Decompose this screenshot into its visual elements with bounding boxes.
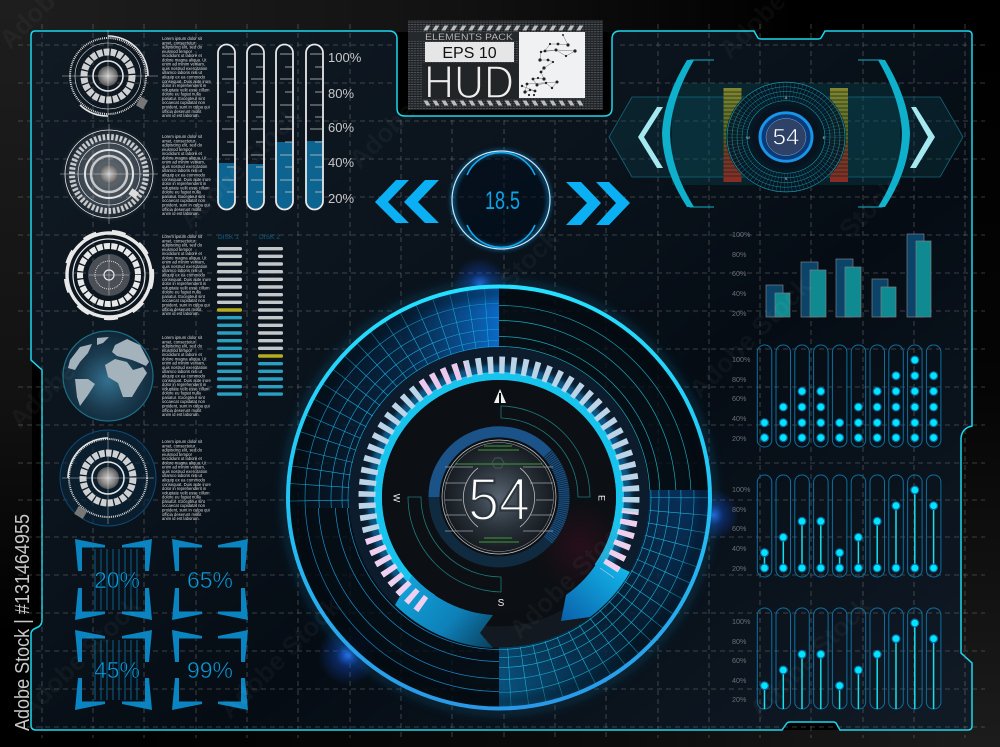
text blocks: lorem ipsum columns: officia deserunt mollit: [162, 207, 202, 212]
text blocks: lorem ipsum columns: quis nostrud exercitation: [162, 264, 208, 269]
chart: disk level bars: DISK 2: [259, 234, 280, 241]
chart: bar chart: 40%: [732, 289, 747, 298]
text blocks: lorem ipsum columns: dolore eu fugiat nulla: [162, 290, 202, 295]
text blocks: lorem ipsum columns: incididunt ut labore et: [162, 456, 203, 461]
text blocks: lorem ipsum columns: proident, sunt in culpa qui: [162, 104, 210, 109]
text blocks: lorem ipsum columns: ullamco laboris nisi ut: [162, 70, 203, 75]
chart: lollipop sliders: 20%: [732, 695, 747, 704]
mini gauge: E: [823, 136, 826, 140]
stock id side label: Adobe Stock | #131464955: [12, 514, 34, 731]
lens glows: [318, 257, 739, 685]
text blocks: lorem ipsum columns: dolor in reprehenderit in: [162, 281, 207, 286]
icon: globe: [63, 331, 153, 421]
gauge: third dial: [65, 231, 153, 319]
inner dark disc: [349, 348, 649, 648]
brackets: [663, 60, 909, 207]
text blocks: lorem ipsum columns: ullamco laboris nisi ut: [162, 369, 203, 374]
mini gauge: A: [785, 96, 788, 100]
text blocks: lorem ipsum columns: quis nostrud exercitation: [162, 66, 208, 71]
text blocks: lorem ipsum columns: voluptate velit esse cillum: [162, 490, 210, 495]
chart: lollipop sliders: 40%: [732, 676, 747, 685]
text blocks: lorem ipsum columns: pariatur. Excepteur sint: [162, 194, 206, 199]
text blocks: lorem ipsum columns: dolore magna aliqua. Ut: [162, 255, 207, 260]
right chevron: [910, 107, 935, 168]
watermark: Adobe Stock: [683, 270, 817, 404]
right level meter: [830, 88, 848, 182]
dial ring: [434, 432, 564, 562]
chart: thermometer tubes: 20%: [328, 191, 354, 206]
text blocks: lorem ipsum columns: proident, sunt in culpa qui: [162, 302, 210, 307]
icon: molecule graphic: [519, 32, 585, 98]
text blocks: lorem ipsum columns: dolore eu fugiat nulla: [162, 495, 202, 500]
text blocks: lorem ipsum columns: proident, sunt in culpa qui: [162, 202, 210, 207]
chart: lollipop sliders: [732, 608, 941, 709]
text blocks: lorem ipsum columns: occaecat cupidatat non: [162, 298, 206, 303]
text blocks: lorem ipsum columns: Lorem ipsum dolor sit: [162, 36, 202, 41]
text blocks: lorem ipsum columns: consequat. Duis aute irure: [162, 378, 212, 383]
watermark: Stock: [493, 223, 565, 294]
text blocks: lorem ipsum columns: Lorem ipsum dolor sit: [162, 234, 202, 239]
text blocks: lorem ipsum columns: officia deserunt mollit: [162, 307, 202, 312]
text blocks: lorem ipsum columns: pariatur. Excepteur sint: [162, 96, 206, 101]
text blocks: lorem ipsum columns: anim id est laborum.: [162, 113, 200, 118]
watermark: Adobe Stock: [213, 590, 347, 724]
compass arcs: [408, 406, 590, 592]
text blocks: lorem ipsum columns: amet, consectetur: [162, 339, 196, 344]
text blocks: lorem ipsum columns: pariatur. Excepteur sint: [162, 294, 206, 299]
chart: thermometer tubes: [218, 44, 362, 210]
watermark: Adobe: [343, 96, 421, 174]
text blocks: lorem ipsum columns: Lorem ipsum dolor sit: [162, 439, 202, 444]
text blocks: lorem ipsum columns: incididunt ut labore et: [162, 53, 203, 58]
text blocks: lorem ipsum columns: enim ad minim veniam,: [162, 160, 205, 165]
chart: dumbbell sliders: 100%: [732, 485, 751, 494]
text blocks: lorem ipsum columns: dolor in reprehenderit in: [162, 382, 207, 387]
chart: dumbbell sliders: 40%: [732, 544, 747, 553]
text blocks: lorem ipsum columns: occaecat cupidatat non: [162, 198, 206, 203]
chart: thermometer tubes: 80%: [328, 86, 354, 101]
outer ring: [294, 292, 704, 702]
chart: lollipop sliders: 60%: [732, 656, 747, 665]
text blocks: lorem ipsum columns: adipiscing elit, sed do: [162, 243, 203, 248]
text blocks: lorem ipsum columns: voluptate velit esse cillum: [162, 285, 210, 290]
text blocks: lorem ipsum columns: incididunt ut labore et: [162, 352, 203, 357]
dial value 54: 54: [468, 466, 530, 533]
text blocks: lorem ipsum columns: quis nostrud exercitation: [162, 469, 208, 474]
text blocks: lorem ipsum columns: dolor in reprehenderit in: [162, 181, 207, 186]
text blocks: lorem ipsum columns: incididunt ut labore et: [162, 151, 203, 156]
text blocks: lorem ipsum columns: dolor in reprehenderit in: [162, 83, 207, 88]
text blocks: lorem ipsum columns: occaecat cupidatat non: [162, 399, 206, 404]
title block: HUD elements pack: HUD: [424, 56, 514, 108]
text blocks: lorem ipsum columns: quis nostrud exercitation: [162, 365, 208, 370]
radial grid top-left quadrant: [290, 288, 499, 508]
chart: thermometer tubes: 100%: [328, 50, 362, 65]
chart: disk level bars: DISK 1: [218, 234, 239, 241]
chart: thermometer tubes: 40%: [328, 155, 354, 170]
left level meter: [724, 88, 742, 182]
chart: dot columns: 100%: [732, 355, 751, 364]
text blocks: lorem ipsum columns: amet, consectetur: [162, 138, 196, 143]
gauge: fifth dial: [60, 430, 156, 526]
watermark: Adobe Stock: [173, 100, 307, 234]
chart: bar chart: 80%: [732, 250, 747, 259]
text blocks: lorem ipsum columns: aliquip ex ea commodo: [162, 273, 206, 278]
text blocks: lorem ipsum columns: dolore eu fugiat nulla: [162, 190, 202, 195]
text blocks: lorem ipsum columns: Lorem ipsum dolor sit: [162, 335, 202, 340]
chart: disk level bars: [217, 234, 283, 396]
text blocks: lorem ipsum columns: pariatur. Excepteur sint: [162, 395, 206, 400]
text blocks: lorem ipsum columns: enim ad minim veniam,: [162, 62, 205, 67]
concentric arcs bottom-left: [304, 508, 499, 692]
text blocks: lorem ipsum columns: Lorem ipsum dolor sit: [162, 134, 202, 139]
percent frames: 65%: [187, 567, 233, 593]
title block: HUD elements pack: EPS 10: [442, 45, 497, 62]
gauge: 18.5 readout: [452, 151, 550, 249]
text blocks: lorem ipsum columns: officia deserunt mollit: [162, 408, 202, 413]
text blocks: lorem ipsum columns: dolore magna aliqua. Ut: [162, 57, 207, 62]
percent frames: 99%: [187, 657, 233, 683]
gauge: second dial: [60, 124, 158, 224]
tick ring: [367, 365, 631, 629]
text blocks: lorem ipsum columns: ullamco laboris nisi ut: [162, 268, 203, 273]
text blocks: lorem ipsum columns: officia deserunt mollit: [162, 512, 202, 517]
mini gauge: W: [746, 136, 750, 140]
compass labels: S: [498, 598, 505, 609]
title block: HUD elements pack: ELEMENTS PACK: [425, 32, 514, 43]
chart: dumbbell sliders: 80%: [732, 505, 747, 514]
compass labels: E: [596, 495, 606, 501]
gauge: 18.5 readout: 18.5: [485, 187, 520, 215]
text blocks: lorem ipsum columns: proident, sunt in culpa qui: [162, 507, 210, 512]
percent frames: 20%: [94, 567, 140, 593]
text blocks: lorem ipsum columns: consequat. Duis aute irure: [162, 482, 212, 487]
small HUD widget: [609, 60, 963, 207]
mini gauge: [726, 81, 846, 193]
chart: bar chart: 100%: [732, 230, 751, 239]
chart: thermometer tubes: 60%: [328, 120, 354, 135]
text blocks: lorem ipsum columns: anim id est laborum.: [162, 211, 200, 216]
percent frames: [75, 539, 248, 710]
arrows: right double chevron: [566, 182, 630, 225]
text blocks: lorem ipsum columns: pariatur. Excepteur sint: [162, 499, 206, 504]
chart: dumbbell sliders: 20%: [732, 564, 747, 573]
chart: dumbbell sliders: [732, 475, 941, 577]
text blocks: lorem ipsum columns: quis nostrud exercitation: [162, 164, 208, 169]
text blocks: lorem ipsum columns: aliquip ex ea commodo: [162, 374, 206, 379]
chart: bar chart: 60%: [732, 269, 747, 278]
chart: dot columns: [732, 345, 941, 447]
text blocks: lorem ipsum columns: voluptate velit esse cillum: [162, 185, 210, 190]
percent frames: 45%: [94, 657, 140, 683]
text blocks: lorem ipsum columns: enim ad minim veniam,: [162, 260, 205, 265]
text blocks: lorem ipsum columns: dolore magna aliqua. Ut: [162, 155, 207, 160]
text blocks: lorem ipsum columns: [162, 36, 212, 521]
watermark: Adobe Stock: [13, 590, 147, 724]
text blocks: lorem ipsum columns: dolore eu fugiat nulla: [162, 92, 202, 97]
chart: dot columns: 40%: [732, 414, 747, 423]
title block: HUD elements pack: [408, 20, 603, 110]
text blocks: lorem ipsum columns: amet, consectetur: [162, 443, 196, 448]
main gauge: [288, 257, 739, 708]
text blocks: lorem ipsum columns: adipiscing elit, sed do: [162, 344, 203, 349]
text blocks: lorem ipsum columns: dolor in reprehenderit in: [162, 486, 207, 491]
text blocks: lorem ipsum columns: adipiscing elit, sed do: [162, 143, 203, 148]
text blocks: lorem ipsum columns: adipiscing elit, sed do: [162, 45, 203, 50]
text blocks: lorem ipsum columns: anim id est laborum.: [162, 311, 200, 316]
text blocks: lorem ipsum columns: eiusmod tempor: [162, 147, 193, 152]
chart: lollipop sliders: 100%: [732, 617, 751, 626]
chart: dot columns: 80%: [732, 375, 747, 384]
text blocks: lorem ipsum columns: ullamco laboris nisi ut: [162, 473, 203, 478]
chart: bar chart: [732, 230, 931, 318]
text blocks: lorem ipsum columns: ullamco laboris nisi ut: [162, 168, 203, 173]
text blocks: lorem ipsum columns: incididunt ut labore et: [162, 251, 203, 256]
compass labels: W: [392, 494, 402, 503]
chart: dot columns: 20%: [732, 434, 747, 443]
text blocks: lorem ipsum columns: eiusmod tempor: [162, 452, 193, 457]
text blocks: lorem ipsum columns: aliquip ex ea commodo: [162, 75, 206, 80]
watermark: Stock: [833, 173, 905, 244]
text blocks: lorem ipsum columns: anim id est laborum.: [162, 412, 200, 417]
text blocks: lorem ipsum columns: officia deserunt mollit: [162, 109, 202, 114]
arrows: left double chevron: [375, 180, 439, 223]
blue band: [365, 363, 633, 631]
text blocks: lorem ipsum columns: voluptate velit esse cillum: [162, 87, 210, 92]
text blocks: lorem ipsum columns: occaecat cupidatat non: [162, 100, 206, 105]
chart: dumbbell sliders: 60%: [732, 524, 747, 533]
chart: bar chart: 20%: [732, 309, 747, 318]
text blocks: lorem ipsum columns: voluptate velit esse cillum: [162, 386, 210, 391]
text blocks: lorem ipsum columns: eiusmod tempor: [162, 348, 193, 353]
text blocks: lorem ipsum columns: dolore magna aliqua. Ut: [162, 356, 207, 361]
radial grid bottom-right quadrant: [499, 490, 708, 706]
text blocks: lorem ipsum columns: eiusmod tempor: [162, 49, 193, 54]
text blocks: lorem ipsum columns: enim ad minim veniam,: [162, 361, 205, 366]
text blocks: lorem ipsum columns: enim ad minim veniam,: [162, 465, 205, 470]
text blocks: lorem ipsum columns: aliquip ex ea commodo: [162, 478, 206, 483]
watermark: Adobe Stock: [743, 590, 877, 724]
text blocks: lorem ipsum columns: proident, sunt in culpa qui: [162, 403, 210, 408]
text blocks: lorem ipsum columns: amet, consectetur: [162, 40, 196, 45]
text blocks: lorem ipsum columns: consequat. Duis aute irure: [162, 177, 212, 182]
dial face: [442, 440, 556, 554]
text blocks: lorem ipsum columns: amet, consectetur: [162, 238, 196, 243]
chart: dot columns: 60%: [732, 394, 747, 403]
left tail: [395, 575, 493, 648]
gauge: top-left dial: [62, 30, 158, 122]
chart: lollipop sliders: 80%: [732, 637, 747, 646]
mini gauge: S: [785, 177, 788, 181]
text blocks: lorem ipsum columns: dolore eu fugiat nulla: [162, 391, 202, 396]
mini gauge: 54: [773, 124, 799, 149]
text blocks: lorem ipsum columns: consequat. Duis aute irure: [162, 277, 212, 282]
text blocks: lorem ipsum columns: eiusmod tempor: [162, 247, 193, 252]
text blocks: lorem ipsum columns: anim id est laborum.: [162, 516, 200, 521]
text blocks: lorem ipsum columns: occaecat cupidatat non: [162, 503, 206, 508]
concentric arcs top-right: [499, 305, 692, 490]
watermark: Adobe: [3, 356, 81, 434]
right tail: [561, 558, 630, 621]
left chevron: [638, 107, 663, 168]
text blocks: lorem ipsum columns: consequat. Duis aute irure: [162, 79, 212, 84]
watermark: Adobe Stock: [503, 510, 637, 644]
text blocks: lorem ipsum columns: aliquip ex ea commodo: [162, 173, 206, 178]
text blocks: lorem ipsum columns: adipiscing elit, sed do: [162, 448, 203, 453]
compass labels: [392, 389, 606, 609]
text blocks: lorem ipsum columns: dolore magna aliqua. Ut: [162, 460, 207, 465]
